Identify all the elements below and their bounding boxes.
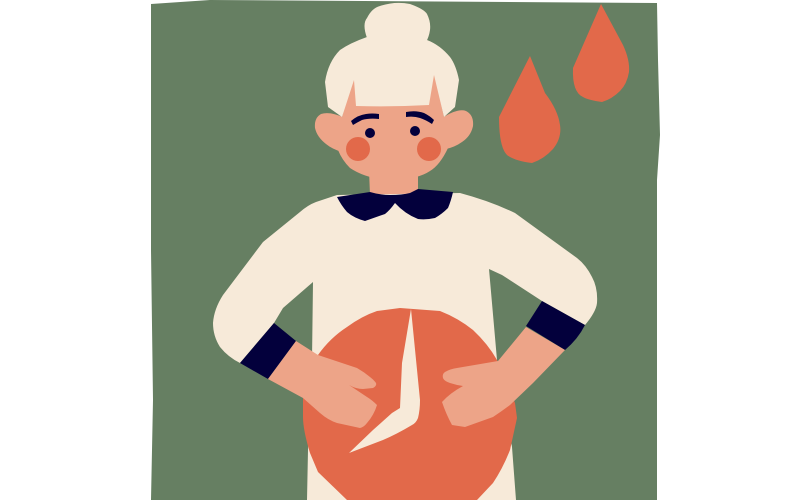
panel: green background <box>151 0 660 500</box>
cuff right <box>526 301 585 350</box>
icon: small blood drop <box>573 4 629 102</box>
eyebrow right <box>406 111 434 124</box>
ear right <box>442 110 473 149</box>
eyebrow left <box>351 114 379 125</box>
eye right <box>410 126 420 136</box>
cheek right <box>417 137 441 161</box>
neck <box>369 170 418 195</box>
face <box>338 72 448 180</box>
ear left <box>315 113 345 152</box>
hand right <box>442 327 565 427</box>
cheek left <box>346 137 370 161</box>
sweater <box>213 193 597 500</box>
hair <box>325 34 459 117</box>
hand left <box>268 341 377 428</box>
belly <box>303 308 517 500</box>
hair bun <box>364 3 430 42</box>
figure: woman <box>213 3 597 500</box>
collar <box>337 189 453 221</box>
icon: large blood drop <box>499 56 560 163</box>
belly crack <box>349 309 420 453</box>
eye left <box>365 128 375 138</box>
cuff left <box>240 323 296 379</box>
